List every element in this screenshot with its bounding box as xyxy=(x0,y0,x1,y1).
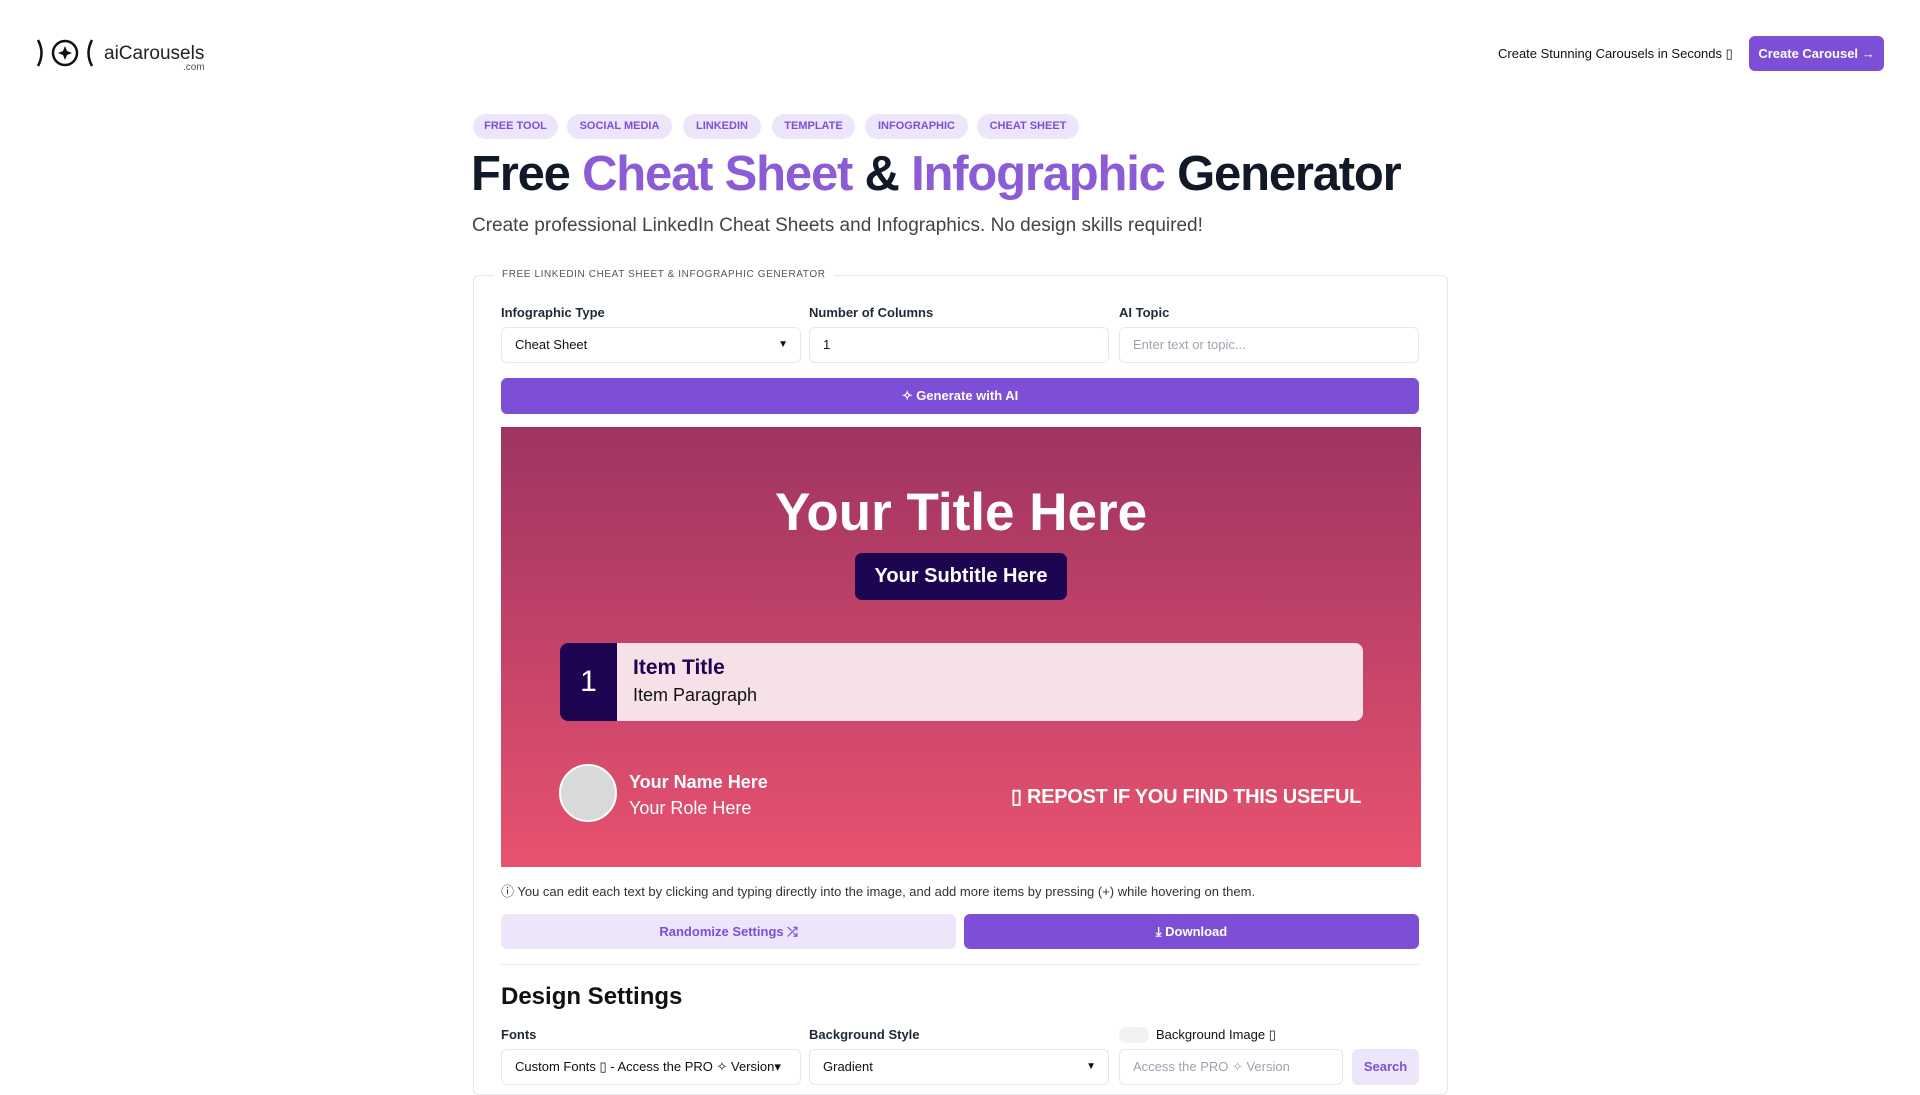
header button xyxy=(1749,36,1884,71)
preview subtitle xyxy=(855,553,1067,600)
text: Background Image ▯ xyxy=(1156,1027,1276,1042)
tags xyxy=(473,114,1079,139)
bg image input: Access the PRO ✧ Version xyxy=(1133,1059,1290,1074)
author: Your Name Here xyxy=(629,772,768,792)
form labels and inputs: Infographic Type xyxy=(501,305,605,320)
tags: INFOGRAPHIC xyxy=(878,120,955,132)
info note: ⓘ You can edit each text by clicking and typing directly into the image, and add more items by pressing (+) while hovering on them. xyxy=(501,884,1255,899)
title: Free Cheat Sheet & Infographic Generator xyxy=(471,147,1401,201)
header tagline: Create Stunning Carousels in Seconds ▯ xyxy=(1498,46,1733,61)
input: topic: Enter text or topic... xyxy=(1133,337,1246,352)
design settings heading: Design Settings xyxy=(501,983,682,1010)
item card: 1 xyxy=(580,665,597,698)
tags: SOCIAL MEDIA xyxy=(580,120,659,132)
subtitle: Create professional LinkedIn Cheat Sheets and Infographics. No design skills required! xyxy=(472,215,1203,236)
generate button xyxy=(501,378,1419,414)
input: columns xyxy=(809,327,1109,363)
search button: Search xyxy=(1364,1059,1407,1074)
bg style select: ▼ xyxy=(1086,1061,1096,1072)
bg image input xyxy=(1119,1049,1343,1085)
generate button: ✧ Generate with AI xyxy=(902,388,1018,403)
header button: Create Carousel → xyxy=(1758,46,1875,61)
preview title: Your Title Here xyxy=(775,483,1147,542)
fonts select: Custom Fonts ▯ - Access the PRO ✧ Version▾ xyxy=(515,1059,781,1074)
bg style select: Gradient xyxy=(823,1059,873,1074)
fonts select xyxy=(501,1049,801,1085)
logo: aiCarousels xyxy=(104,43,204,64)
preview: infographic xyxy=(501,427,1421,867)
toggle xyxy=(1119,1027,1149,1043)
logo: .com xyxy=(183,62,205,73)
tags: LINKEDIN xyxy=(696,120,748,132)
select: type xyxy=(501,327,801,363)
author xyxy=(629,772,768,818)
input: topic xyxy=(1119,327,1419,363)
select: type: ▼ xyxy=(778,339,788,350)
download button xyxy=(964,914,1419,949)
text: Fonts xyxy=(501,1027,536,1042)
author: Your Role Here xyxy=(629,798,751,818)
panel xyxy=(473,275,1448,1095)
tags: TEMPLATE xyxy=(784,120,843,132)
text: AI Topic xyxy=(1119,305,1169,320)
logo xyxy=(36,39,205,73)
preview subtitle: Your Subtitle Here xyxy=(874,565,1048,587)
item card xyxy=(560,643,1363,721)
tags: FREE TOOL xyxy=(484,120,547,132)
bg style select xyxy=(809,1049,1109,1085)
randomize button xyxy=(501,914,956,949)
randomize button: Randomize Settings ⤮ xyxy=(659,924,798,939)
input: columns: 1 xyxy=(823,337,830,352)
item card: Item Title xyxy=(633,656,725,679)
text: FREE LINKEDIN CHEAT SHEET & INFOGRAPHIC GENERATOR xyxy=(502,269,826,280)
search button xyxy=(1352,1049,1419,1085)
repost cta: ▯ REPOST IF YOU FIND THIS USEFUL xyxy=(1011,786,1361,808)
text: Background Style xyxy=(809,1027,920,1042)
tags: CHEAT SHEET xyxy=(990,120,1066,132)
text: Number of Columns xyxy=(809,305,933,320)
select: type: Cheat Sheet xyxy=(515,337,587,352)
item card: Item Paragraph xyxy=(633,685,757,705)
download button: ⤓ Download xyxy=(1156,924,1227,939)
avatar xyxy=(559,764,617,822)
